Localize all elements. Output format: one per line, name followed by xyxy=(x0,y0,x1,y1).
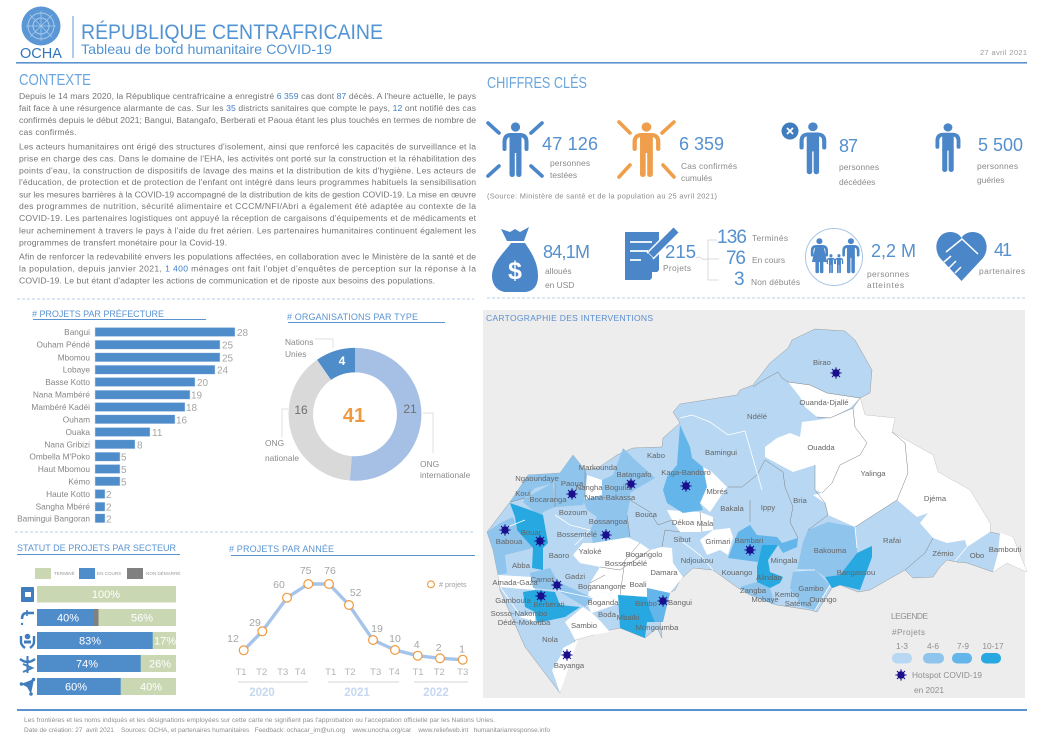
stat: partenaires: partenaires xyxy=(979,266,1025,276)
stacked bar chart: statut de projets par secteur: 83% xyxy=(79,636,101,648)
line chart: projets par année: T3 xyxy=(457,667,468,678)
legend: map: 10-17 xyxy=(982,641,1004,651)
line chart: projets par année: 12 xyxy=(227,633,239,645)
stat: 215 projets xyxy=(663,241,696,273)
legend: statut: NON DÉMARRÉ xyxy=(146,570,180,576)
stat: cas confirmés xyxy=(679,134,737,183)
stat: cas confirmés: 6 359 xyxy=(679,134,724,154)
icon: deceased person xyxy=(782,122,824,174)
stat: alloués en USD xyxy=(543,242,590,290)
legend: map: en 2021 xyxy=(914,685,944,695)
legend: statut xyxy=(35,568,180,579)
donut chart: organisations par type: ONG xyxy=(265,438,284,448)
map: place names: Ouanda-Djallé xyxy=(799,398,849,407)
stat: personnes atteintes: personnes xyxy=(867,269,909,279)
text block: paragraph 2: prise en charge des cas. Dans le domaine de l'EHA, les activités ont porté sur la construction et la réhabilitation des xyxy=(19,153,476,163)
map: place names xyxy=(491,358,1022,670)
map: place names: Koui xyxy=(515,489,531,498)
legend: projets: # projets xyxy=(439,580,467,589)
map: place names: Kouango xyxy=(722,568,752,577)
stat: alloués en USD: en USD xyxy=(545,280,574,290)
line chart: projets par année: T2 xyxy=(256,667,267,678)
map: place names: Bossembélé xyxy=(605,559,647,568)
bar chart: projets par préfecture: 24 xyxy=(217,366,229,377)
stat: personnes décédées: 87 xyxy=(839,136,858,156)
text block: paragraph 1 xyxy=(19,91,476,137)
logo: OCHA xyxy=(20,6,62,62)
bar chart: projets par préfecture: Haut Mbomou xyxy=(38,464,90,474)
heading: projets par préfecture: # PROJETS PAR PRÉFECTURE xyxy=(32,309,164,319)
heading: statut de projets: STATUT DE PROJETS PAR SECTEUR xyxy=(17,543,176,553)
map: place names: Ouadda xyxy=(807,443,835,452)
map: place names: Ippy xyxy=(761,503,775,512)
bar chart: projets par préfecture: Bamingui Bangoran xyxy=(17,513,90,523)
stat: personnes atteintes: atteintes xyxy=(867,280,904,290)
bar chart: projets par préfecture: Sangha Mbéré xyxy=(36,502,90,512)
donut chart: organisations par type: Nations xyxy=(285,337,313,347)
icon: logistics xyxy=(20,678,35,696)
heading: projets par année: # PROJETS PAR ANNÉE xyxy=(229,544,334,554)
icon: money bag xyxy=(492,227,538,292)
line chart: projets par année: 76 xyxy=(324,565,336,577)
map: place names: Mingala xyxy=(771,556,798,565)
stat: personnes testées: 47 126 xyxy=(542,134,598,154)
map: place names: Mbrés xyxy=(706,487,728,496)
stat: project status breakdown: 136 xyxy=(717,227,747,248)
stat: personnes atteintes xyxy=(867,241,916,290)
stacked bar chart: statut de projets par secteur: 74% xyxy=(76,658,98,670)
text block: paragraph 1: cas confirmés. xyxy=(19,127,76,137)
icon: education book xyxy=(21,587,34,602)
donut chart: organisations par type xyxy=(265,312,471,480)
stat: partenaires: 41 xyxy=(994,240,1012,260)
date: 27 avril 2021 xyxy=(980,48,1027,57)
map: place names: Grimari xyxy=(705,537,731,546)
text block: paragraph 2: points d'eau, la construction de dispositifs de lavage des mains et la distribution de kits d'hygiène. Les acteurs de xyxy=(19,165,476,175)
heading: chiffres clés: CHIFFRES CLÉS xyxy=(487,75,587,92)
map: place names: Amada-Gaza xyxy=(492,578,538,587)
bar chart: projets par préfecture: 5 xyxy=(121,465,127,476)
bar chart: projets par préfecture: 25 xyxy=(222,341,234,352)
line chart: projets par année: 10 xyxy=(389,633,401,645)
map: place names: Bossangoa xyxy=(589,517,628,526)
map: place names: Bogangolo xyxy=(626,550,662,559)
stat: 215 projets: 215 xyxy=(665,241,696,262)
bar chart: projets par préfecture: Ouaka xyxy=(66,427,90,437)
bar chart: projets par préfecture: Basse Kotto xyxy=(45,377,90,387)
stat: personnes guéries: personnes xyxy=(977,161,1018,171)
map: place names: Bakala xyxy=(720,504,744,513)
map: place names: Paoua xyxy=(561,479,584,488)
text block: paragraph 2: l'éducation, de protection et de protection de l'enfant ont intégré dans leurs programmes habituels la sensibilisation xyxy=(19,177,476,187)
bar chart: projets par préfecture: Bangui xyxy=(64,327,90,337)
bar chart: projets par préfecture: Kémo xyxy=(68,476,90,486)
text block: paragraph 2 xyxy=(19,141,477,247)
panel: chiffres clés xyxy=(487,75,1025,292)
icon: money bag: $ xyxy=(508,257,522,285)
text block: paragraph 3: COVID-19. Le but étant d'adapter les actions de communication et de riposte aux besoins des populations. xyxy=(19,275,435,285)
stat: project status breakdown: En cours xyxy=(752,255,785,265)
stacked bar chart: statut de projets par secteur: 60% xyxy=(65,682,87,694)
text block: paragraph 3 xyxy=(19,251,476,285)
panel: cartographie des interventions xyxy=(483,310,1027,698)
text block: paragraph 2: Les acteurs humanitaires ont érigé des structures d'isolement, ainsi que renforcé les capacités de surveillance et la xyxy=(19,141,476,151)
line chart: projets par année: 2022 xyxy=(423,687,449,699)
line chart: projets par année: 2020 xyxy=(249,687,275,699)
line chart: projets par année: 2021 xyxy=(344,687,370,699)
map: place names: Carnot xyxy=(530,575,554,584)
stat: project status breakdown xyxy=(717,227,800,290)
bar chart: projets par préfecture: 11 xyxy=(152,428,163,439)
map: place names: Nola xyxy=(542,635,559,644)
map: place names: Bamingui xyxy=(705,448,737,457)
map: place names: Zémio xyxy=(932,549,954,558)
bar chart: projets par préfecture: Nana Mambéré xyxy=(33,390,90,400)
map: place names: Ngaoundaye xyxy=(515,474,559,483)
map: place names: Bimbo xyxy=(635,599,657,608)
map: place names: Kabo xyxy=(647,451,665,460)
map: place names: Baboua xyxy=(496,537,523,546)
map: place names: Boganda xyxy=(588,598,619,607)
bar chart: projets par préfecture: Mbomou xyxy=(58,352,90,362)
map: place names: Bocaranga xyxy=(529,495,567,504)
text block: paragraph 2: COVID-19. Les partenaires logistiques ont appuyé la réception de cargaisons d'équipements et de médicaments et xyxy=(19,213,477,223)
line chart: projets par année: 19 xyxy=(371,623,383,635)
stat: personnes décédées: décédées xyxy=(839,177,875,187)
stat: personnes décédées xyxy=(839,136,879,187)
map: place names: Bangui xyxy=(668,598,692,607)
stat: cas confirmés: Cas confirmés xyxy=(681,161,737,171)
bar chart: projets par préfecture: Mambéré Kadéi xyxy=(31,402,90,412)
text block: paragraph 1: fait face à une résurgence alarmante de cas. Sur les 35 districts sanitaires que compte le pays, 12 ont notifié des cas xyxy=(19,103,476,113)
panel: contexte xyxy=(19,72,477,285)
bar chart: projets par préfecture: 2 xyxy=(106,490,112,501)
map: place names: Djéma xyxy=(924,494,947,503)
map: place names: Bozoum xyxy=(559,508,587,517)
map: place names: Mala xyxy=(697,519,714,528)
stat: personnes guéries xyxy=(977,135,1023,185)
donut chart: organisations par type: 4 xyxy=(339,354,346,368)
legend: map: Hotspot COVID-19 xyxy=(912,670,982,680)
map: place names: Yaloké xyxy=(579,547,601,556)
text block: paragraph 2: sur les mesures barrières à la COVID-19 accompagné de la distribution de kits de gestion COVID-19. La mise en œuvre xyxy=(19,189,476,199)
line chart: projets par année: 4 xyxy=(414,639,420,651)
legend: statut: TERMINÉ xyxy=(54,570,75,576)
bar chart: projets par préfecture: Lobaye xyxy=(63,365,90,375)
line chart: projets par année: T1 xyxy=(235,667,247,678)
map: place names: Sibut xyxy=(673,535,692,544)
stacked bar chart: statut de projets par secteur: 26% xyxy=(149,658,171,670)
bracket connector xyxy=(696,240,719,280)
legend: map xyxy=(891,611,1004,695)
stat: personnes guéries: 5 500 xyxy=(978,135,1023,155)
stat: partenaires xyxy=(979,240,1025,276)
bar chart: projets par préfecture: Haute Kotto xyxy=(46,489,90,499)
bar chart: projets par préfecture: 20 xyxy=(197,378,209,389)
stacked bar chart: statut de projets par secteur: 40% xyxy=(140,682,162,694)
stat: alloués en USD: alloués xyxy=(545,266,572,276)
text block: paragraph 1: Depuis le 14 mars 2020, la République centrafricaine a enregistré 6 359 cas dont 87 décès. A l'heure actuelle, le pays xyxy=(19,91,476,101)
map: place names: Bouca xyxy=(635,510,658,519)
subtitle: Tableau de bord humanitaire COVID-19 xyxy=(81,41,332,57)
bar chart: projets par préfecture: Ombella M'Poko xyxy=(29,452,90,462)
map: prefectures xyxy=(487,329,1027,693)
legend: map: 7-9 xyxy=(957,641,969,651)
line chart: projets par année: T3 xyxy=(277,667,288,678)
donut chart: organisations par type: 16 xyxy=(294,403,308,417)
stat: cas confirmés: cumulés xyxy=(681,173,712,183)
map: place names: Bambouti xyxy=(989,545,1022,554)
line chart: projets par année: T4 xyxy=(389,667,400,678)
bar chart: projets par préfecture: 18 xyxy=(186,403,198,414)
donut chart: organisations par type: Unies xyxy=(285,349,306,359)
line chart: projets par année: T2 xyxy=(344,667,356,678)
bar chart: projets par préfecture: 19 xyxy=(191,391,203,402)
bar chart: projets par préfecture: Ouham xyxy=(63,414,90,424)
heading: cartographie: CARTOGRAPHIE DES INTERVENTIONS xyxy=(486,313,653,323)
line chart: projets par année: T1 xyxy=(325,667,336,678)
map: place names: Bossemtélé xyxy=(557,530,597,539)
icon: family xyxy=(806,228,862,286)
icon: water tap xyxy=(21,610,34,625)
text block: paragraph 2: leur acheminement à travers le pays à l'aide du fret aérien. Les partenaires humanitaires continuent également les xyxy=(19,225,476,235)
map: place names: Markounda xyxy=(579,463,618,472)
map: place names: Bouar xyxy=(521,528,542,537)
donut chart: organisations par type: nationale xyxy=(265,453,299,463)
map: place names: Ouango xyxy=(809,595,837,604)
stacked bar chart: statut de projets par secteur: 17% xyxy=(154,636,176,648)
footer xyxy=(17,709,1027,734)
bar chart: projets par préfecture: Nana Gribizi xyxy=(44,439,90,449)
bar chart: projets par préfecture: 5 xyxy=(121,477,127,488)
map: place names: Bayanga xyxy=(554,661,585,670)
map: place names: Mbaïki xyxy=(617,613,640,622)
stat: alloués en USD: 84,1M xyxy=(543,242,590,262)
text block: paragraph 3: Afin de renforcer la redevabilité envers les populations affectées, en collaboration avec le Ministère de la santé et de xyxy=(19,251,476,261)
icon: recovered person xyxy=(937,123,959,172)
heading: contexte: CONTEXTE xyxy=(19,72,91,89)
map: place names: Zangba xyxy=(740,586,767,595)
stat: personnes testées: testées xyxy=(550,170,577,180)
map: place names: Bambari xyxy=(735,536,764,545)
donut chart: organisations par type: 21 xyxy=(403,402,417,416)
map: hotspots xyxy=(499,367,842,661)
map: place names: Boali xyxy=(629,580,647,589)
line chart: projets par année: T2 xyxy=(434,667,445,678)
line chart: projets par année xyxy=(227,544,475,699)
map: place names: Kembo xyxy=(775,590,799,599)
header xyxy=(16,6,1027,64)
map: place names: Gamboula xyxy=(495,596,531,605)
map: place names: Sosso-Nakombo xyxy=(491,609,547,618)
legend: map: 1-3 xyxy=(896,641,908,651)
line chart: projets par année: 60 xyxy=(273,579,285,591)
map: place names: Obo xyxy=(970,551,984,560)
map: place names: Batangafo xyxy=(616,470,652,479)
source note: (Source: Ministère de santé et de la population au 25 avril 2021) xyxy=(487,192,717,200)
map: place names: Baoro xyxy=(549,551,569,560)
map: place names: Ndjoukou xyxy=(681,556,713,565)
text block: paragraph 1: confirmés depuis le début 2021; Bangui, Batangafo, Berberati et Paoua étant les plus touchés en termes de nombre de xyxy=(19,115,476,125)
title: RÉPUBLIQUE CENTRAFRICAINE xyxy=(81,21,383,44)
line chart: projets par année: T3 xyxy=(370,667,381,678)
map: place names: Bangassou xyxy=(837,568,875,577)
footer: Date de création: 27 avril 2021 Sources: OCHA, et partenaires humanitaires Feedback: ochacar_im@un.org www.unocha.org/car www.reliefweb.int humanitarianresponse.info xyxy=(24,727,550,734)
line chart: projets par année: 2 xyxy=(436,642,442,654)
map: place names: Satéma xyxy=(785,599,812,608)
map: place names: Rafai xyxy=(883,536,901,545)
map: place names: Bria xyxy=(793,496,808,505)
line chart: projets par année: T4 xyxy=(295,667,306,678)
donut chart: organisations par type: internationale xyxy=(420,470,471,480)
bar chart: projets par préfecture: 28 xyxy=(237,328,249,339)
map: place names: Boda xyxy=(598,610,617,619)
map: place names: Abba xyxy=(512,561,531,570)
bar chart: projets par préfecture: 2 xyxy=(106,503,112,514)
stat: project status breakdown: 76 xyxy=(726,248,746,269)
bar chart: projets par préfecture: 5 xyxy=(121,453,127,464)
line chart: projets par année: 75 xyxy=(300,565,312,577)
map: place names: Gadzi xyxy=(565,572,585,581)
stat: project status breakdown: Non débutés xyxy=(751,277,800,287)
map: place names: Nana-Bakassa xyxy=(585,493,636,502)
map: place names: Gambo xyxy=(798,584,824,593)
map: place names: Birao xyxy=(813,358,831,367)
map: place names: Kaga-Bandoro xyxy=(661,468,711,477)
map: place names: Berbérati xyxy=(533,600,565,609)
icon: protection hands xyxy=(21,634,34,648)
stat: personnes atteintes: 2,2 M xyxy=(871,241,916,261)
map: place names: Sambio xyxy=(571,621,597,630)
legend: statut: EN COURS xyxy=(97,571,121,576)
stacked bar chart: statut de projets par secteur: 40% xyxy=(57,612,79,624)
bar chart: projets par préfecture xyxy=(17,309,249,525)
stat: 215 projets: Projets xyxy=(663,263,691,273)
map: place names: Alindao xyxy=(756,573,782,582)
text block: paragraph 2: programmes de transfert monétaire pour la Covid-19. xyxy=(19,237,227,247)
stat: personnes testées: personnes xyxy=(550,158,590,168)
logo: OCHA: OCHA xyxy=(20,46,62,62)
line chart: projets par année: T1 xyxy=(412,667,424,678)
stacked bar chart: statut de projets par secteur xyxy=(17,543,180,696)
legend: map: 4-6 xyxy=(927,641,939,651)
legend: map: #Projets xyxy=(892,627,925,637)
bar chart: projets par préfecture: 2 xyxy=(106,514,112,525)
icon: document and pen xyxy=(625,230,676,280)
icon: person tested xyxy=(488,122,542,177)
map: place names: Ndélé xyxy=(747,412,767,421)
stat: project status breakdown: 3 xyxy=(734,269,745,290)
stacked bar chart: statut de projets par secteur: 56% xyxy=(131,612,153,624)
text block: paragraph 2: des programmes de nutrition, sécurité alimentaire et CCCM/NFI/Abri a également été adaptée au contexte de la xyxy=(19,201,476,211)
icon: handshake heart xyxy=(936,232,987,281)
map: place names: Dékoa xyxy=(672,518,695,527)
bar chart: projets par préfecture: 16 xyxy=(176,415,188,426)
bar chart: projets par préfecture: 8 xyxy=(137,440,143,451)
stat: personnes décédées: personnes xyxy=(839,162,879,172)
donut chart: organisations par type: 41 xyxy=(343,405,365,427)
text block: paragraph 3: la population, depuis janvier 2021, 1 400 ménages ont fait l'objet d'enquêtes de perception sur la réponse à la xyxy=(19,264,476,274)
bar chart: projets par préfecture: Ouham Péndé xyxy=(36,340,90,350)
map: place names: Bakouma xyxy=(814,546,847,555)
donut chart: organisations par type: ONG xyxy=(420,459,439,469)
legend: map: LEGENDE xyxy=(891,611,928,621)
line chart: projets par année: 52 xyxy=(350,587,362,599)
heading: organisations par type: # ORGANISATIONS PAR TYPE xyxy=(287,312,418,322)
map: place names: Damara xyxy=(650,568,678,577)
icon: health caduceus xyxy=(20,656,35,673)
map: place names: Mobaye xyxy=(751,595,779,604)
map: place names: Boganangone xyxy=(578,582,626,591)
map: place names: Nangha Boguila xyxy=(576,483,631,492)
map: place names: Yalinga xyxy=(860,469,886,478)
footer: Les frontières et les noms indiqués et les désignations employées sur cette carte ne signifient pas l'approbation ou l'acceptation officielle par les Nations Unies. xyxy=(24,717,495,724)
stat: project status breakdown: Terminés xyxy=(752,233,788,243)
map: place names: Mongoumba xyxy=(636,623,679,632)
map: place names: Dédé-Mokouba xyxy=(498,618,551,627)
line chart: projets par année: 1 xyxy=(459,644,465,656)
stat: personnes testées xyxy=(542,134,598,180)
bar chart: projets par préfecture: 25 xyxy=(222,353,234,364)
line chart: projets par année: 29 xyxy=(249,617,261,629)
stat: personnes guéries: guéries xyxy=(977,175,1004,185)
icon: confirmed case person xyxy=(619,122,674,177)
stacked bar chart: statut de projets par secteur: 100% xyxy=(92,589,120,601)
